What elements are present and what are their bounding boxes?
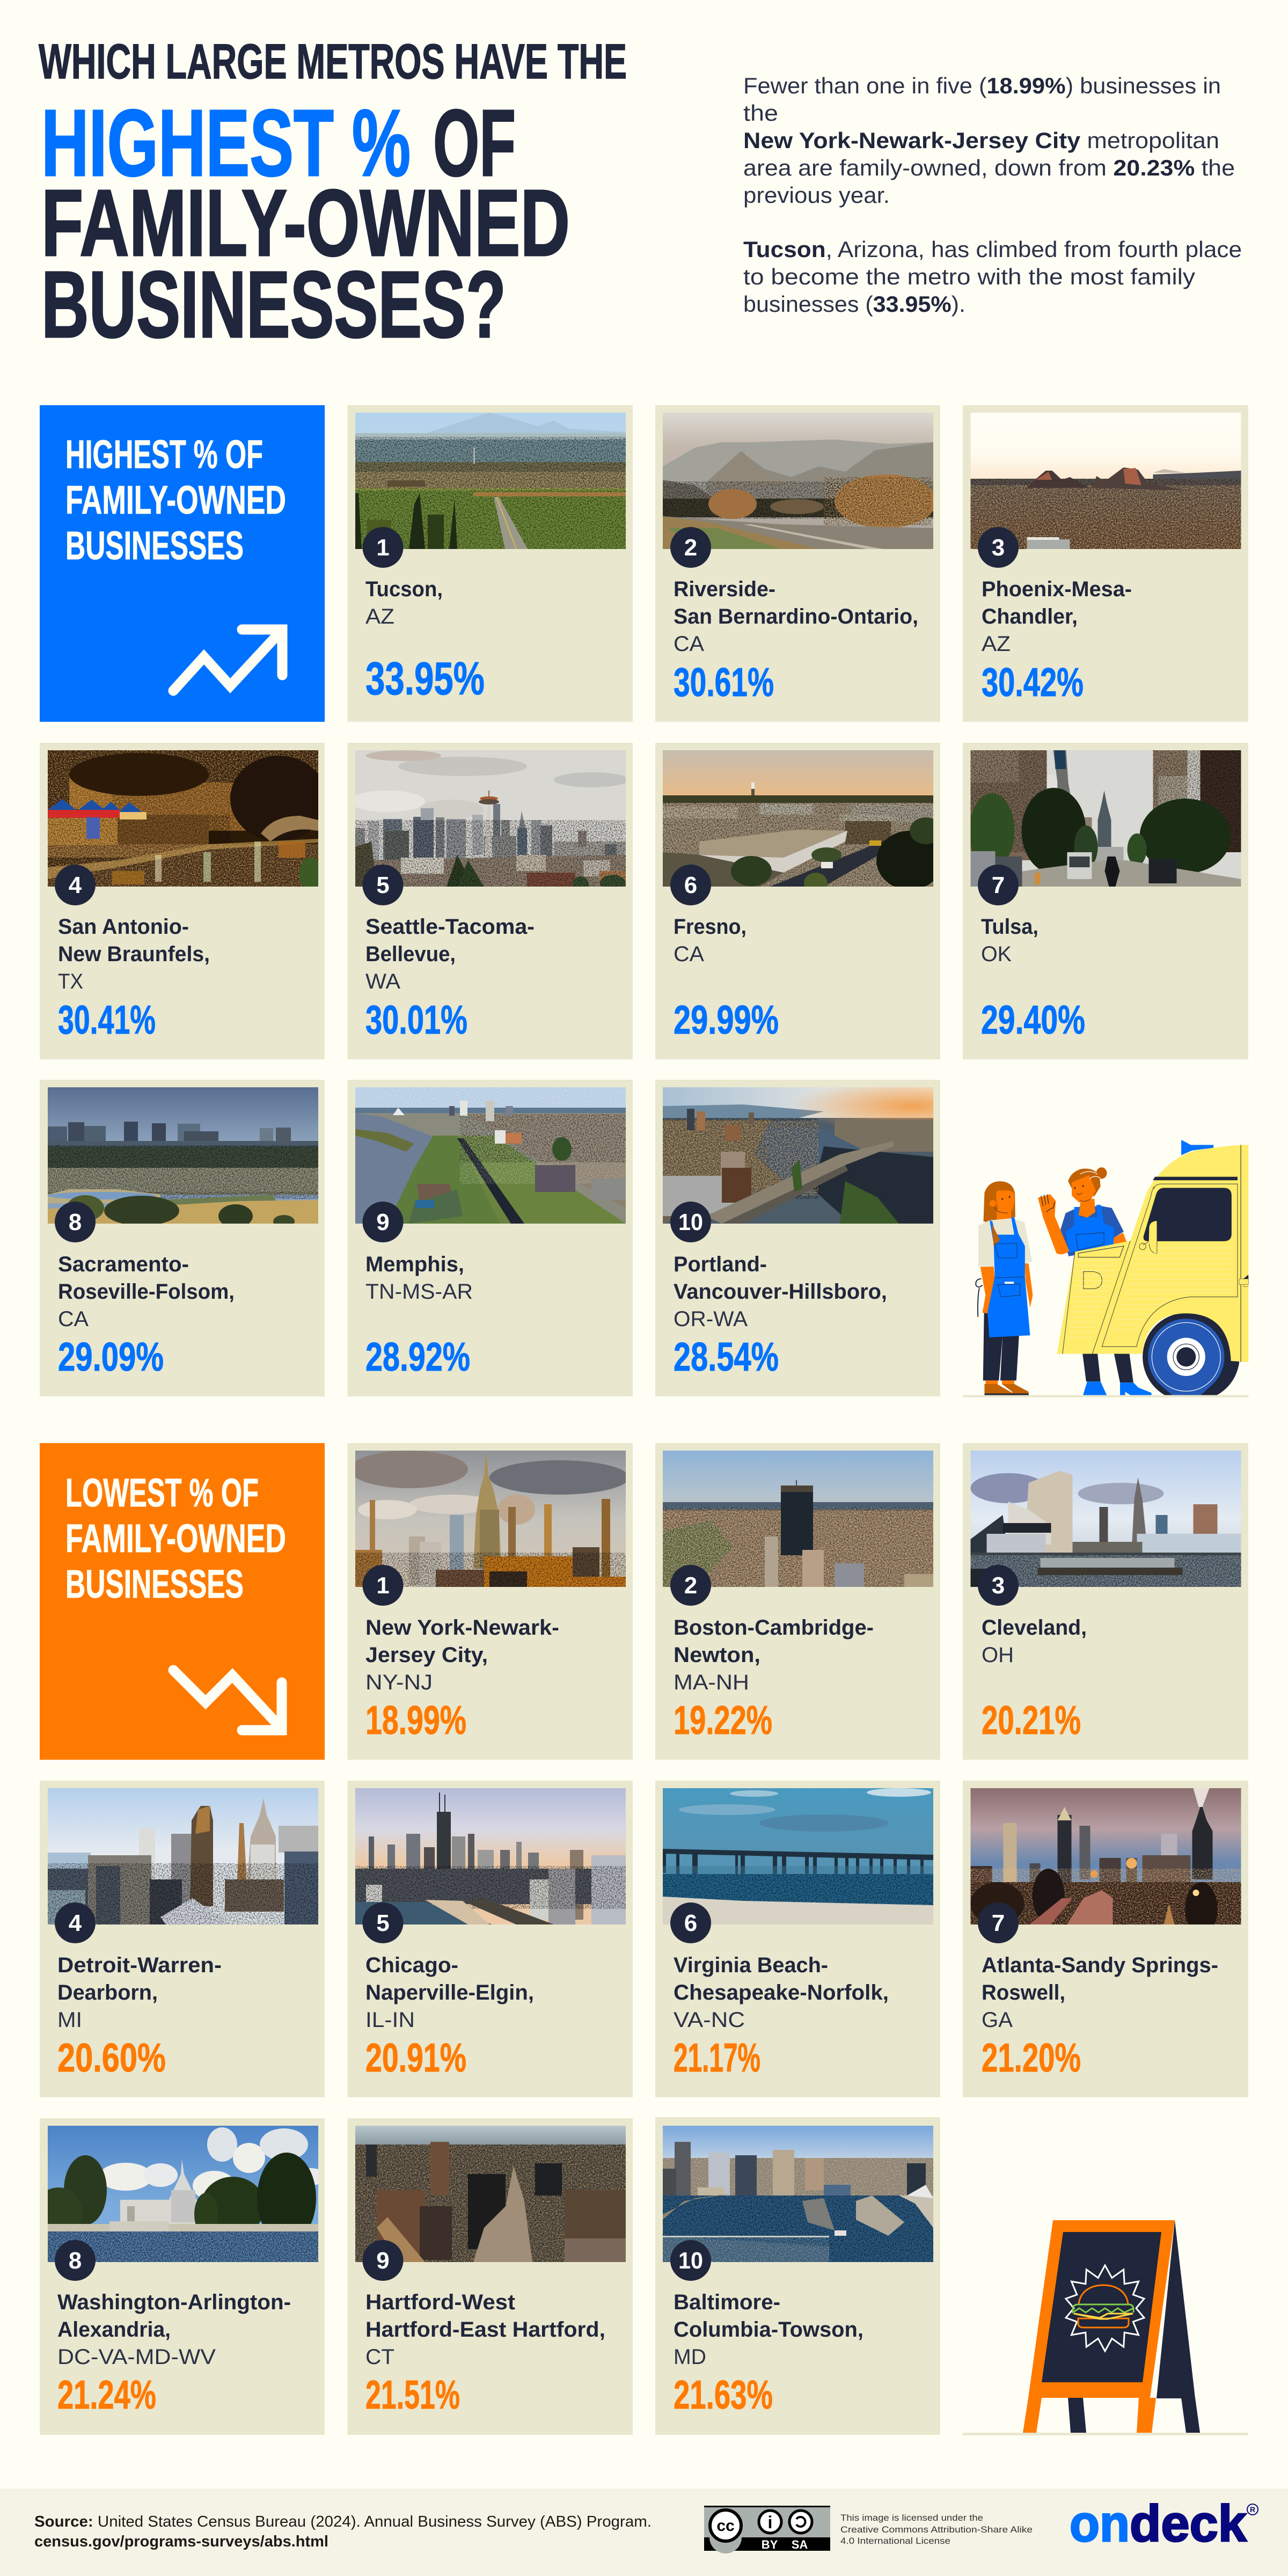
city name: Jersey City, <box>365 1643 488 1667</box>
city name: Riverside- <box>674 577 775 601</box>
card: Tucson <box>348 405 633 722</box>
source text <box>34 2513 652 2550</box>
intro text block: New York-Newark-Jersey City metropolitan <box>743 128 1219 153</box>
rank badge: 5 <box>376 1910 390 1936</box>
city name: Roswell, <box>982 1981 1065 2004</box>
panel: lowest heading: LOWEST % OF <box>65 1470 259 1515</box>
state: CA <box>674 942 704 966</box>
city name <box>674 2290 863 2341</box>
photo: Cleveland <box>970 1451 1241 1587</box>
photo: Riverside <box>663 413 933 549</box>
intro text block <box>743 73 1242 317</box>
city name <box>365 1616 559 1667</box>
truck hub <box>1148 1319 1224 1395</box>
city name <box>365 2290 605 2341</box>
percentage: 29.40% <box>981 997 1085 1042</box>
percentage: 21.20% <box>982 2035 1081 2080</box>
rank badge: 2 <box>684 535 697 561</box>
rank badge <box>670 1202 711 1242</box>
rank badge <box>670 1902 711 1943</box>
icon: Creative Commons badge: cc <box>716 2517 735 2535</box>
percentage: 21.24% <box>57 2372 156 2417</box>
photo: Tulsa <box>970 750 1241 887</box>
rank badge: 1 <box>376 535 390 561</box>
percentage: 28.54% <box>674 1334 779 1379</box>
city name <box>982 1953 1218 2004</box>
percentage: 28.92% <box>365 1334 470 1379</box>
truck body <box>1057 1140 1248 1362</box>
intro text block: previous year. <box>743 182 890 208</box>
rank badge: 10 <box>678 1209 703 1235</box>
card: San Antonio <box>40 743 327 1059</box>
photo: Portland <box>663 1087 933 1224</box>
percentage: 18.99% <box>365 1697 466 1743</box>
rank badge: 7 <box>992 1910 1005 1936</box>
woman right <box>1038 1167 1152 1395</box>
city name: Atlanta-Sandy Springs- <box>982 1953 1218 1977</box>
rank badge <box>363 2240 404 2281</box>
city name: New York-Newark- <box>365 1616 559 1640</box>
intro text block: Tucson, Arizona, has climbed from fourth place <box>743 237 1242 262</box>
city name: Phoenix-Mesa- <box>982 577 1132 601</box>
percentage: 33.95% <box>365 653 485 705</box>
panel: lowest heading <box>40 1443 325 1760</box>
city name <box>57 2290 291 2341</box>
source text: Source: United States Census Bureau (2024). Annual Business Survey (ABS) Program. <box>34 2513 652 2530</box>
city name <box>674 1953 889 2004</box>
ground line <box>963 1395 1248 1397</box>
illustration: two women and yellow food truck <box>963 1140 1248 1408</box>
ground mask <box>1143 1395 1248 1408</box>
city name: Alexandria, <box>57 2318 171 2341</box>
footer band <box>0 2489 1288 2576</box>
city name: San Antonio- <box>58 915 189 939</box>
card: New York <box>348 1443 633 1760</box>
panel: lowest heading: FAMILY-OWNED <box>65 1516 286 1561</box>
city name: Bellevue, <box>365 942 456 966</box>
photo: Atlanta <box>970 1788 1241 1936</box>
card: Virginia Beach <box>655 1781 940 2097</box>
percentage: 20.91% <box>365 2035 466 2080</box>
photo: Baltimore <box>663 2126 933 2262</box>
percentage: 20.60% <box>57 2035 166 2080</box>
photo: Fresno <box>663 750 933 887</box>
city name: Sacramento- <box>58 1253 189 1276</box>
city name: Naperville-Elgin, <box>365 1981 534 2004</box>
intro text block: the <box>743 100 778 126</box>
photo: San Antonio <box>48 750 318 887</box>
card: Washington <box>34 2118 327 2435</box>
rank badge <box>363 1565 404 1606</box>
title: WHICH LARGE METROS HAVE THE <box>39 34 627 89</box>
intro text block: Fewer than one in five ( 18.99%) businesses in <box>743 73 1221 98</box>
card: Seattle <box>348 743 633 1059</box>
state: CT <box>365 2345 394 2369</box>
rank badge <box>670 2240 711 2281</box>
card: Cleveland <box>963 1443 1248 1760</box>
card: Boston <box>655 1443 940 1760</box>
rank badge: 2 <box>684 1572 697 1599</box>
card: Hartford <box>348 2118 633 2435</box>
intro text block: area are family-owned, down from 20.23% the <box>743 155 1235 180</box>
rank badge: 3 <box>992 1572 1005 1599</box>
percentage: 21.63% <box>674 2372 773 2417</box>
logo: OnDeck: on <box>1070 2495 1130 2552</box>
rank badge: 8 <box>69 1209 82 1235</box>
title: OF <box>433 91 516 196</box>
card: Tulsa <box>963 743 1248 1059</box>
city name <box>57 1953 222 2004</box>
rank badge <box>363 1202 404 1242</box>
title <box>39 34 627 357</box>
logo: OnDeck: R <box>1250 2505 1255 2514</box>
icon: Creative Commons badge <box>704 2506 830 2553</box>
photo: Virginia Beach <box>663 1788 933 1924</box>
card: Sacramento <box>40 1080 325 1396</box>
card: Atlanta <box>963 1781 1248 2097</box>
percentage: 30.42% <box>982 660 1084 705</box>
photo: Seattle <box>355 750 626 887</box>
photo: Washington <box>34 2126 327 2262</box>
city name: Chesapeake-Norfolk, <box>674 1981 889 2004</box>
city name: Hartford-East Hartford, <box>365 2318 605 2341</box>
city name <box>674 577 918 628</box>
rank badge: 9 <box>376 2248 390 2274</box>
state: GA <box>982 2008 1013 2032</box>
card: Memphis <box>348 1080 633 1396</box>
city name: Portland- <box>674 1253 767 1276</box>
city name: Baltimore- <box>674 2290 780 2314</box>
rank badge <box>55 1202 96 1242</box>
card: Baltimore <box>655 2117 940 2435</box>
card: Detroit <box>40 1781 325 2097</box>
rank badge <box>55 865 96 905</box>
card: Portland <box>655 1080 940 1396</box>
city name <box>365 1953 534 2004</box>
icon: Creative Commons badge: i <box>768 2513 772 2532</box>
photo: Hartford <box>355 2126 626 2262</box>
panel: highest heading: HIGHEST % OF <box>65 432 263 477</box>
panel: highest heading: BUSINESSES <box>65 523 244 568</box>
card: Phoenix <box>963 405 1248 722</box>
state: CA <box>58 1307 89 1331</box>
rank badge <box>978 1565 1019 1606</box>
rank badge <box>363 527 404 568</box>
logo: OnDeck: deck <box>1130 2495 1247 2552</box>
percentage: 30.41% <box>58 997 156 1042</box>
state: DC-VA-MD-WV <box>57 2345 216 2369</box>
state: OK <box>981 942 1012 966</box>
title: BUSINESSES? <box>41 252 506 357</box>
photo: Tucson <box>355 413 626 549</box>
rank badge <box>978 527 1019 568</box>
rank badge <box>670 527 711 568</box>
panel: highest heading: FAMILY-OWNED <box>65 478 286 522</box>
card: Fresno <box>655 743 943 1059</box>
rank badge: 3 <box>992 535 1005 561</box>
city name: San Bernardino-Ontario, <box>674 605 918 628</box>
source text: census.gov/programs-surveys/abs.html <box>34 2533 328 2550</box>
city name: Boston-Cambridge- <box>674 1616 874 1640</box>
state: NY-NJ <box>365 1671 433 1694</box>
city name <box>365 915 535 966</box>
card: Riverside <box>655 405 940 722</box>
city name: Dearborn, <box>57 1981 158 2004</box>
panel: highest heading <box>40 405 325 722</box>
rank badge: 6 <box>684 1910 697 1936</box>
license text: Creative Commons Attribution-Share Alike <box>840 2524 1033 2535</box>
intro text block: businesses (33.95%). <box>743 291 965 317</box>
city name <box>58 915 210 966</box>
percentage: 19.22% <box>674 1697 772 1743</box>
city name: Virginia Beach- <box>674 1953 828 1977</box>
state: TX <box>58 970 83 993</box>
rank badge <box>670 865 711 905</box>
city name <box>674 1253 887 1304</box>
city name: Detroit-Warren- <box>57 1953 222 1977</box>
illustration: A-frame burger sign <box>963 2220 1248 2435</box>
photo: Chicago <box>355 1788 626 1924</box>
rank badge <box>978 1902 1019 1943</box>
state: WA <box>365 970 400 993</box>
state: CA <box>674 632 704 656</box>
rank badge <box>670 1565 711 1606</box>
city name <box>58 1253 235 1304</box>
photo: Sacramento <box>48 1087 318 1224</box>
city name: Chandler, <box>982 605 1078 628</box>
title: HIGHEST % <box>41 91 411 196</box>
rank badge: 7 <box>992 872 1005 898</box>
woman left <box>976 1181 1033 1395</box>
percentage: 21.51% <box>365 2372 460 2417</box>
photo: Detroit <box>48 1788 318 1924</box>
state: VA-NC <box>674 2008 745 2032</box>
icon: burger in starburst <box>1066 2265 1144 2351</box>
state: MA-NH <box>674 1671 749 1694</box>
city name: Fresno, <box>674 915 747 939</box>
rank badge <box>55 1902 96 1943</box>
state: TN-MS-AR <box>365 1280 473 1304</box>
photo: Memphis <box>355 1087 626 1224</box>
city name: Hartford-West <box>365 2290 515 2314</box>
license text: This image is licensed under the <box>840 2513 983 2523</box>
city name: Vancouver-Hillsboro, <box>674 1280 887 1304</box>
rank badge: 4 <box>69 1910 82 1936</box>
state: OR-WA <box>674 1307 748 1331</box>
rank badge: 10 <box>678 2248 703 2274</box>
icon: rising arrow <box>173 630 282 691</box>
city name: Tulsa, <box>981 915 1038 939</box>
city name: New Braunfels, <box>58 942 210 966</box>
intro text block: to become the metro with the most family <box>743 264 1195 289</box>
city name <box>674 1616 874 1667</box>
percentage: 30.01% <box>365 997 467 1042</box>
icon: Creative Commons badge: BY <box>762 2538 778 2551</box>
city name: Memphis, <box>365 1253 464 1276</box>
rank badge: 4 <box>69 872 82 898</box>
license text <box>840 2513 1033 2546</box>
state: IL-IN <box>365 2008 415 2032</box>
city name: Chicago- <box>365 1953 458 1977</box>
rank badge <box>363 865 404 905</box>
rank badge <box>363 1902 404 1943</box>
state: MD <box>674 2345 706 2369</box>
state: MI <box>57 2008 82 2032</box>
percentage: 29.09% <box>58 1334 164 1379</box>
percentage: 30.61% <box>674 660 774 705</box>
state: OH <box>982 1643 1014 1667</box>
city name: Newton, <box>674 1643 760 1667</box>
card: Chicago <box>348 1781 633 2097</box>
percentage: 20.21% <box>982 1697 1081 1743</box>
city name <box>982 577 1132 628</box>
photo: Boston <box>663 1451 933 1587</box>
photo: Phoenix <box>970 413 1241 549</box>
title: FAMILY-OWNED <box>41 171 570 276</box>
percentage: 21.17% <box>674 2035 760 2080</box>
percentage: 29.99% <box>674 997 779 1042</box>
rank badge: 9 <box>376 1209 390 1235</box>
truck wheel <box>1143 1313 1240 1401</box>
rank badge <box>978 865 1019 905</box>
license text: 4.0 International License <box>840 2536 950 2546</box>
rank badge: 8 <box>69 2248 82 2274</box>
city name: Roseville-Folsom, <box>58 1280 235 1304</box>
state: AZ <box>365 605 394 628</box>
rank badge: 6 <box>684 872 697 898</box>
city name: Washington-Arlington- <box>57 2290 291 2314</box>
icon: falling arrow <box>173 1670 282 1730</box>
city name: Cleveland, <box>982 1616 1087 1640</box>
state: AZ <box>982 632 1011 656</box>
photo: New York <box>355 1451 626 1587</box>
rank badge <box>55 2240 96 2281</box>
logo: OnDeck <box>1070 2495 1258 2552</box>
city name: Tucson, <box>365 577 443 601</box>
panel: lowest heading: BUSINESSES <box>65 1562 244 1606</box>
rank badge: 5 <box>376 872 390 898</box>
rank badge: 1 <box>376 1572 390 1599</box>
city name: Columbia-Towson, <box>674 2318 863 2341</box>
icon: Creative Commons badge: SA <box>792 2538 808 2551</box>
city name: Seattle-Tacoma- <box>365 915 535 939</box>
